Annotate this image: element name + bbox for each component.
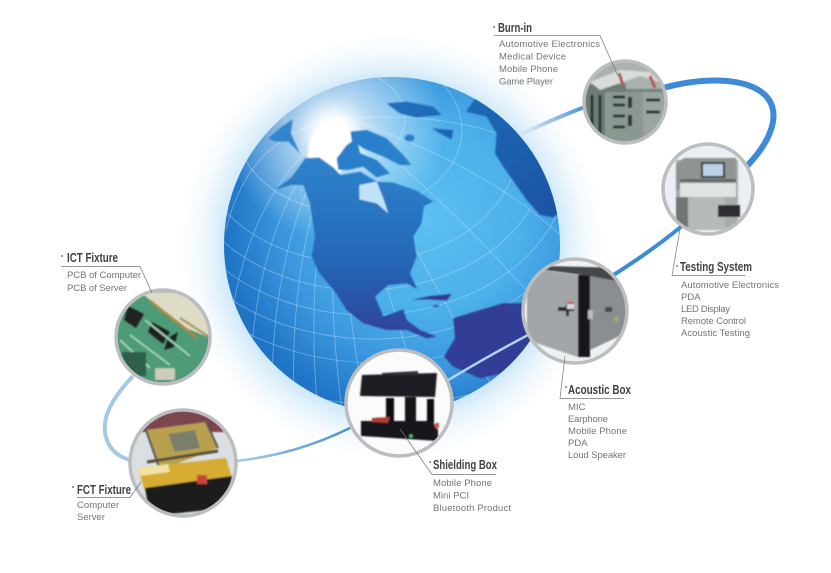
label: burn-in: Game Player — [499, 76, 553, 88]
label: testing system — [672, 229, 779, 339]
globe grid lines — [224, 78, 560, 406]
label: shielding box: Shielding Box — [433, 458, 497, 472]
label: acoustic box: Loud Speaker — [568, 450, 626, 461]
label: testing system: Remote Control — [681, 316, 746, 327]
label: burn-in: Mobile Phone — [499, 64, 558, 75]
photo: shielding box — [346, 350, 452, 456]
label: ICT fixture: PCB of Server — [67, 283, 127, 294]
photo: ICT fixture — [116, 290, 214, 384]
photo: testing system — [663, 144, 753, 234]
caribbean islands — [412, 294, 452, 307]
label: burn-in: Burn-in — [498, 21, 532, 35]
label: FCT fixture — [72, 482, 141, 523]
label: acoustic box: Mobile Phone — [568, 426, 627, 437]
connecting ribbon: testing system to acoustic box — [612, 226, 682, 276]
photo: burn-in — [584, 61, 667, 144]
label: burn-in: Automotive Electronics — [499, 39, 600, 50]
label: testing system: PDA — [681, 292, 701, 303]
arctic ice — [307, 117, 352, 173]
iceland — [404, 134, 414, 142]
connecting ribbon: across the globe — [445, 335, 528, 382]
label: shielding box — [400, 429, 511, 514]
label: testing system: Automotive Electronics — [681, 280, 779, 291]
label: burn-in — [493, 21, 618, 88]
label: shielding box: Mobile Phone — [433, 478, 492, 489]
label: testing system: Acoustic Testing — [681, 328, 750, 339]
globe — [194, 49, 590, 442]
label: ICT fixture: ICT Fixture — [67, 251, 118, 265]
arctic shine — [240, 77, 439, 232]
photo: FCT fixture — [130, 410, 236, 516]
label: burn-in: Medical Device — [499, 52, 566, 62]
connecting ribbon: shielding box to FCT — [236, 428, 350, 461]
canadian islands — [337, 138, 390, 177]
label: shielding box: Bluetooth Product — [433, 503, 511, 514]
europe and africa — [387, 97, 563, 217]
siberia tip — [268, 119, 300, 153]
hudson bay — [359, 182, 388, 213]
south america — [444, 303, 535, 378]
label: ICT fixture — [61, 251, 152, 294]
label: FCT fixture: FCT Fixture — [77, 483, 131, 497]
north america — [275, 157, 437, 338]
label: acoustic box: PDA — [568, 438, 588, 449]
greenland — [351, 130, 412, 165]
label: acoustic box: MIC — [568, 402, 586, 413]
label: ICT fixture: PCB of Computer — [67, 270, 141, 281]
label: FCT fixture: Computer — [77, 500, 119, 511]
label: acoustic box — [560, 356, 631, 461]
land masses — [268, 97, 563, 378]
label: acoustic box: Acoustic Box — [568, 383, 631, 397]
connecting ribbon: burn-in to testing system — [663, 81, 773, 166]
photo: acoustic box — [523, 259, 628, 363]
label: testing system: LED Display — [681, 304, 730, 315]
label: testing system: Testing System — [680, 260, 752, 274]
connecting ribbon: burn-in to globe — [522, 105, 590, 134]
connecting ribbon: FCT to ICT — [105, 376, 133, 460]
label: shielding box: Mini PCI — [433, 490, 469, 502]
label: acoustic box: Earphone — [568, 414, 608, 425]
label: FCT fixture: Server — [77, 512, 105, 523]
